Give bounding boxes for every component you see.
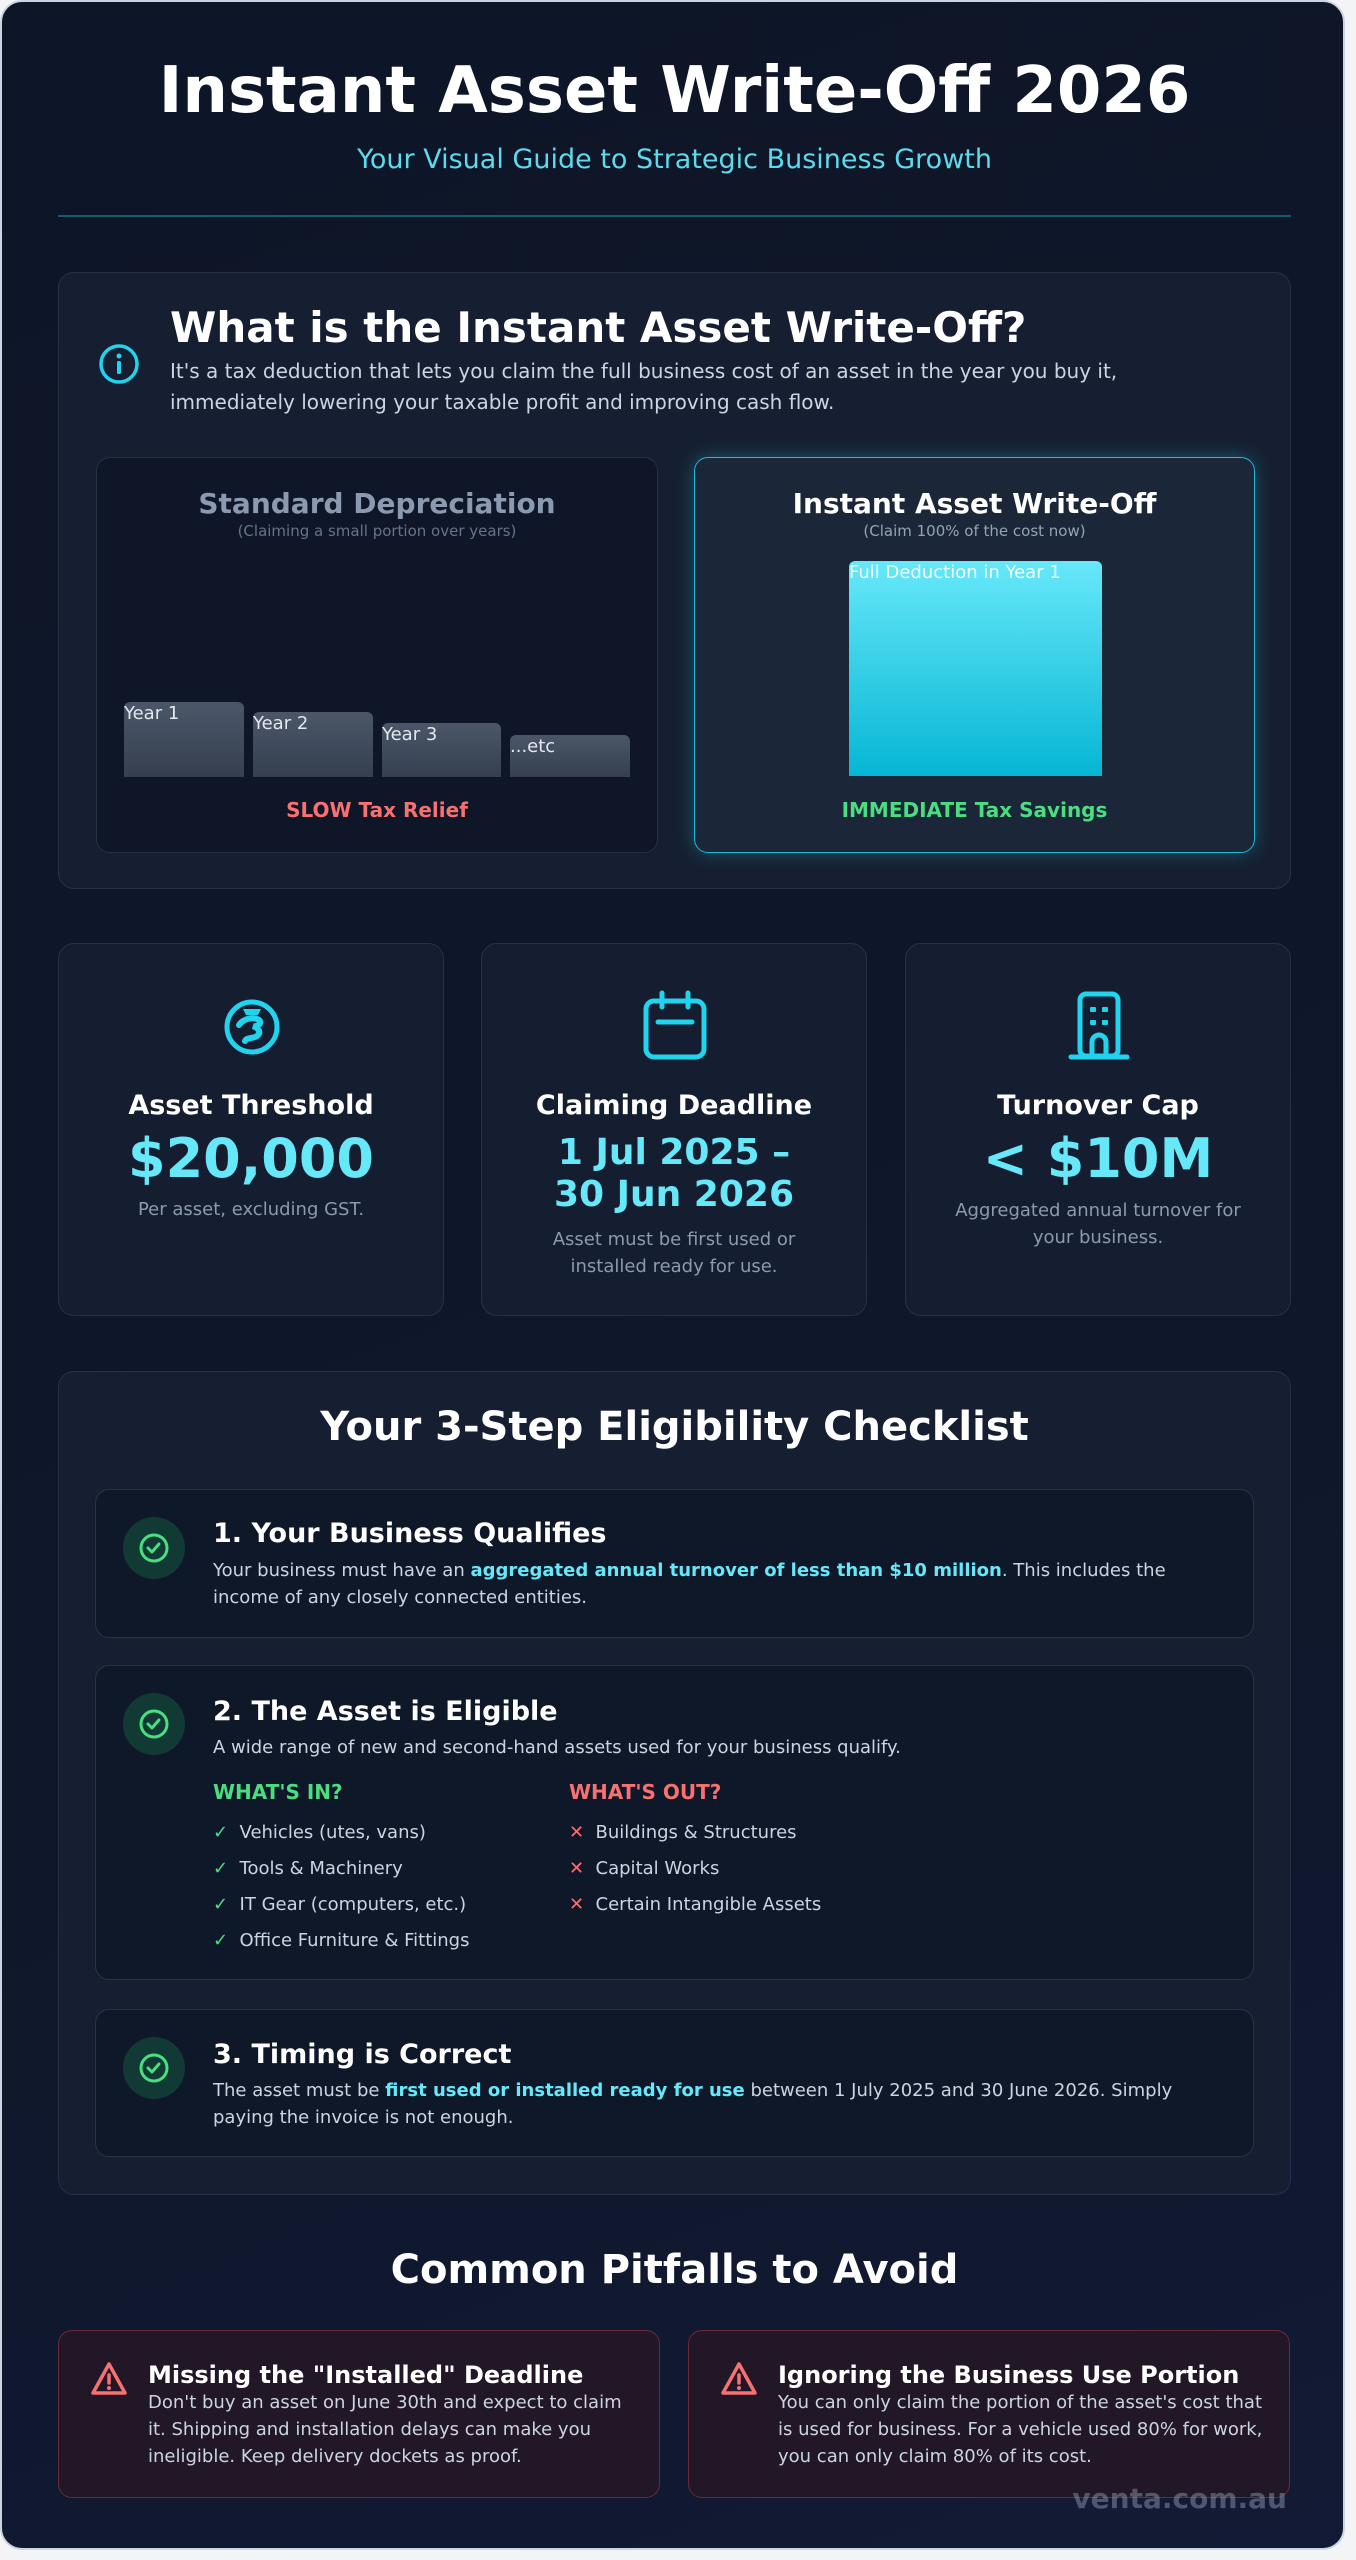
stat: claiming deadline: 1 Jul 2025 – — [558, 1132, 790, 1173]
step 2: A wide range of new and second-hand assets used for your business qualify. — [213, 1737, 901, 1758]
panel: what is — [58, 272, 1291, 889]
pitfall: installed deadline: Don't buy an asset on June 30th and expect to claim it. Shipping and installation delays can make you ineligible. Keep delivery dockets as proof. — [148, 2392, 622, 2467]
list: what's in: ✓ Tools & Machinery — [213, 1858, 403, 1879]
bar chart: depreciation: Year 3 — [382, 724, 437, 745]
card: standard depreciation: (Claiming a small portion over years) — [238, 522, 516, 540]
step 3: The asset must be first used or installed ready for use between 1 July 2025 and 30 June 2026. Simply paying the invoice is not enough. — [213, 2080, 1172, 2128]
bar: full deduction — [849, 561, 1102, 776]
icon: building — [1068, 992, 1130, 1060]
bar chart: depreciation: Year 1 — [124, 703, 179, 724]
heading: What is the Instant Asset Write-Off? — [170, 303, 1026, 352]
step 1: Your business must have an aggregated annual turnover of less than $10 million. This includes the income of any closely connected entities. — [213, 1560, 1166, 1608]
stat: claiming deadline: 30 Jun 2026 — [554, 1174, 794, 1215]
icon: check — [123, 2037, 185, 2099]
stat: claiming deadline: installed ready for use. — [570, 1256, 778, 1277]
pitfall: installed deadline: Missing the "Installed" Deadline — [148, 2361, 583, 2389]
icon: check — [123, 1517, 185, 1579]
stat: claiming deadline: Claiming Deadline — [536, 1090, 812, 1121]
bar chart: depreciation — [124, 702, 630, 777]
heading: checklist: Your 3-Step Eligibility Checklist — [320, 1404, 1029, 1450]
card: standard depreciation: SLOW Tax Relief — [286, 798, 468, 822]
pitfall: installed deadline — [58, 2330, 660, 2498]
list: what's out: ✕ Certain Intangible Assets — [569, 1894, 821, 1915]
list: what's out — [569, 1780, 821, 1915]
stat: turnover cap: Turnover Cap — [997, 1090, 1199, 1121]
panel: checklist — [58, 1371, 1291, 2195]
list: what's out: ✕ Capital Works — [569, 1858, 719, 1879]
card: standard depreciation — [96, 457, 658, 853]
card: standard depreciation: Standard Depreciation — [198, 487, 556, 520]
pitfall: business use: You can only claim the portion of the asset's cost that is used for business. For a vehicle used 80% for work, you can only claim 80% of its cost. — [778, 2392, 1262, 2467]
stat: asset threshold: $20,000 — [128, 1127, 374, 1190]
list: what's in: ✓ Vehicles (utes, vans) — [213, 1822, 426, 1843]
list: what's in: WHAT'S IN? — [213, 1780, 343, 1804]
card: instant write-off: IMMEDIATE Tax Savings — [842, 798, 1107, 822]
step 2 — [95, 1665, 1254, 1980]
title: Instant Asset Write-Off 2026 — [159, 54, 1190, 128]
stat: claiming deadline: Asset must be first used or — [553, 1229, 795, 1250]
text: definition: It's a tax deduction that lets you claim the full business cost of an asset in the year you buy it, immediately lowering your taxable profit and improving cash flow. — [170, 359, 1117, 414]
stat: turnover cap: Aggregated annual turnover for — [955, 1200, 1241, 1221]
list: what's out: WHAT'S OUT? — [569, 1780, 721, 1804]
bar: full deduction: Full Deduction in Year 1 — [849, 562, 1061, 583]
icon: warning — [721, 2362, 757, 2395]
icon: check — [123, 1693, 185, 1755]
list: what's in: ✓ IT Gear (computers, etc.) — [213, 1894, 466, 1915]
step 3: 3. Timing is Correct — [213, 2039, 511, 2070]
icon: coin — [224, 1000, 280, 1054]
stat: turnover cap — [905, 943, 1291, 1316]
step 1 — [95, 1489, 1254, 1638]
icon: warning — [91, 2362, 127, 2395]
list: what's out: ✕ Buildings & Structures — [569, 1822, 797, 1843]
icon: calendar — [644, 990, 706, 1060]
card: instant write-off: Instant Asset Write-Off — [793, 487, 1156, 520]
stat: claiming deadline — [481, 943, 867, 1316]
card: instant write-off — [694, 457, 1255, 853]
stat: turnover cap: your business. — [1033, 1227, 1163, 1248]
list: what's in: ✓ Office Furniture & Fittings — [213, 1930, 469, 1951]
step 3 — [95, 2009, 1254, 2157]
watermark: venta.com.au — [1072, 2482, 1287, 2515]
stat: asset threshold — [58, 943, 444, 1316]
step 1: 1. Your Business Qualifies — [213, 1518, 607, 1549]
list: what's in — [213, 1780, 469, 1951]
subtitle: Your Visual Guide to Strategic Business Growth — [357, 144, 992, 175]
stat: turnover cap: < $10M — [983, 1127, 1213, 1190]
pitfall: business use — [688, 2330, 1290, 2498]
stat: asset threshold: Per asset, excluding GST. — [138, 1199, 364, 1220]
heading: pitfalls: Common Pitfalls to Avoid — [391, 2247, 958, 2293]
icon: info — [99, 344, 139, 384]
pitfall: business use: Ignoring the Business Use Portion — [778, 2361, 1239, 2389]
stat: asset threshold: Asset Threshold — [128, 1090, 374, 1121]
step 2: 2. The Asset is Eligible — [213, 1696, 558, 1727]
card: instant write-off: (Claim 100% of the cost now) — [863, 522, 1086, 540]
bar chart: depreciation: Year 2 — [253, 713, 308, 734]
bar chart: depreciation: ...etc — [510, 736, 555, 757]
